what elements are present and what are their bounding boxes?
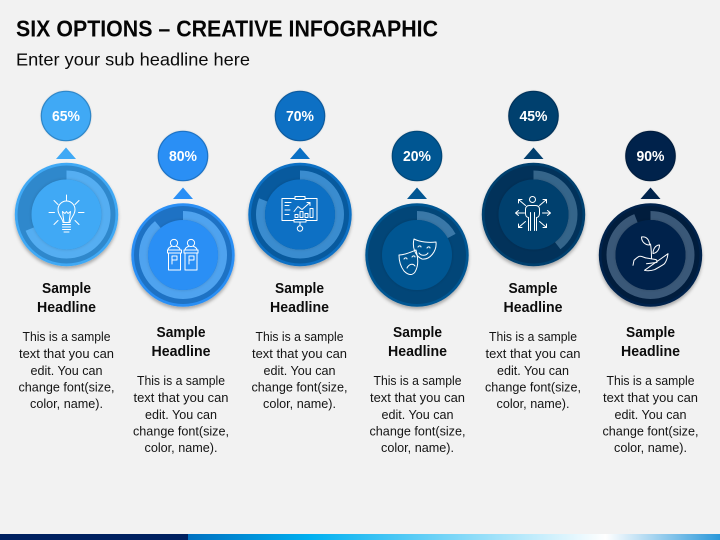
body text: This is a sample [256, 330, 344, 344]
title: SIX OPTIONS – CREATIVE INFOGRAPHIC [16, 16, 438, 42]
body text: change font(size, [370, 424, 466, 438]
body text: edit. You can [145, 408, 217, 422]
icon: person with arrows [516, 196, 550, 230]
headline: Headline [388, 343, 447, 360]
percentage badge [509, 91, 558, 141]
icon: two podium speakers [168, 239, 198, 270]
percentage badge [158, 131, 208, 181]
body text: color, name). [144, 441, 218, 455]
body text: edit. You can [497, 364, 569, 378]
body text: text that you can [603, 391, 698, 405]
option 4: 20% [365, 131, 469, 455]
percentage badge: 20% [403, 148, 431, 165]
option 2: 80% [131, 131, 235, 455]
headline [37, 280, 96, 316]
body text: This is a sample [374, 374, 462, 388]
body text: edit. You can [382, 408, 454, 422]
headline: Headline [504, 299, 562, 316]
body text: text that you can [252, 347, 347, 361]
percentage badge [392, 131, 442, 181]
headline: Sample [275, 280, 324, 297]
progress ring [248, 163, 352, 266]
headline: Sample [626, 324, 675, 341]
pointer triangle [640, 188, 660, 199]
percentage badge: 90% [636, 148, 664, 165]
headline [152, 324, 210, 360]
icon: presentation board [282, 196, 317, 231]
body text: This is a sample [22, 330, 111, 344]
body text: color, name). [381, 441, 454, 455]
body text: This is a sample [606, 374, 695, 388]
body text [485, 330, 581, 411]
percentage badge: 80% [169, 148, 197, 165]
pointer triangle [407, 188, 427, 199]
body text [370, 374, 466, 455]
body text [133, 374, 229, 455]
percentage badge: 65% [52, 108, 80, 125]
body text: color, name). [496, 397, 570, 411]
body text: color, name). [30, 397, 103, 411]
percentage badge [626, 131, 675, 181]
option 5: 45% [482, 91, 585, 411]
headline: Sample [508, 280, 558, 297]
icon: hand holding plant [633, 237, 668, 271]
headline [388, 324, 447, 360]
body text: color, name). [263, 397, 336, 411]
body text: edit. You can [264, 364, 336, 378]
body text: text that you can [134, 391, 229, 405]
headline [270, 280, 329, 316]
body text: change font(size, [252, 380, 348, 394]
option 6: 90% [599, 131, 702, 455]
progress ring [482, 163, 585, 266]
pointer triangle [173, 188, 193, 199]
headline [621, 324, 680, 360]
pointer triangle [290, 148, 310, 159]
headline: Headline [270, 299, 329, 316]
option 1: 65% [15, 91, 118, 411]
body text [602, 374, 698, 455]
headline: Headline [37, 299, 96, 316]
body text [252, 330, 348, 411]
progress ring [131, 203, 235, 307]
headline [504, 280, 562, 316]
headline: Headline [152, 343, 210, 360]
body text: edit. You can [614, 408, 687, 422]
pointer triangle [524, 148, 544, 159]
progress ring [15, 163, 118, 266]
percentage badge [275, 91, 325, 141]
body text: edit. You can [30, 364, 103, 378]
body text: change font(size, [602, 424, 698, 438]
footer bar [0, 534, 720, 540]
headline: Sample [156, 324, 206, 341]
progress ring [599, 203, 702, 307]
body text: change font(size, [18, 380, 114, 394]
pointer triangle [56, 148, 76, 159]
body text [18, 330, 114, 411]
body text: color, name). [614, 441, 687, 455]
body text: change font(size, [133, 424, 229, 438]
icon: theatre masks [399, 239, 436, 275]
percentage badge [41, 91, 91, 141]
subtitle: Enter your sub headline here [16, 50, 250, 70]
body text: This is a sample [489, 330, 577, 344]
headline: Sample [42, 280, 91, 297]
headline: Sample [393, 324, 442, 341]
headline: Headline [621, 343, 680, 360]
option 3: 70% [248, 91, 352, 411]
icon: light bulb [49, 195, 84, 232]
body text: This is a sample [137, 374, 225, 388]
progress ring [365, 203, 469, 307]
body text: text that you can [19, 347, 114, 361]
percentage badge: 45% [520, 108, 548, 125]
percentage badge: 70% [286, 108, 314, 125]
body text: text that you can [486, 347, 581, 361]
body text: text that you can [370, 391, 465, 405]
body text: change font(size, [485, 380, 581, 394]
